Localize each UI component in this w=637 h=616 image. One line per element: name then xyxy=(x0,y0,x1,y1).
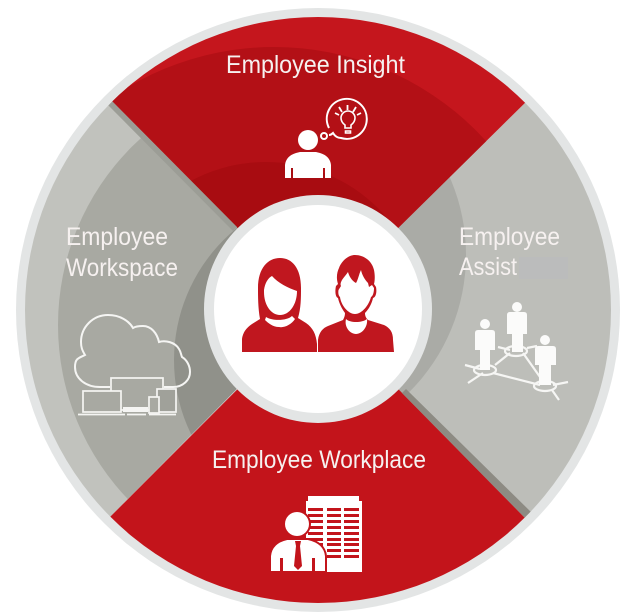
icon: person with lightbulb thought xyxy=(285,99,367,178)
segment shadows xyxy=(106,99,237,231)
heading: Employee Workplace: Employee Workplace xyxy=(212,446,426,474)
heading: Employee Assist: Employee xyxy=(459,223,560,251)
heading: Employee Assist: Assist xyxy=(459,253,517,281)
panel: employee workplace xyxy=(110,390,525,603)
heading: Employee Workspace xyxy=(66,223,178,282)
heading: Employee Workspace: Workspace xyxy=(66,254,178,282)
panel: employee assist xyxy=(398,103,611,512)
panel: employee workspace xyxy=(25,106,238,516)
icon: cloud with devices xyxy=(75,315,190,414)
icon: building with businessman xyxy=(270,496,362,572)
icon: connected people network xyxy=(465,302,568,400)
redaction patch xyxy=(519,257,568,279)
heading: Employee Insight: Employee Insight xyxy=(226,51,405,79)
heading: Employee Assist xyxy=(459,223,560,281)
center circle xyxy=(204,195,432,423)
icon: two people xyxy=(242,255,394,352)
panel: employee insight xyxy=(112,17,526,228)
heading: Employee Workspace: Employee xyxy=(66,223,168,251)
